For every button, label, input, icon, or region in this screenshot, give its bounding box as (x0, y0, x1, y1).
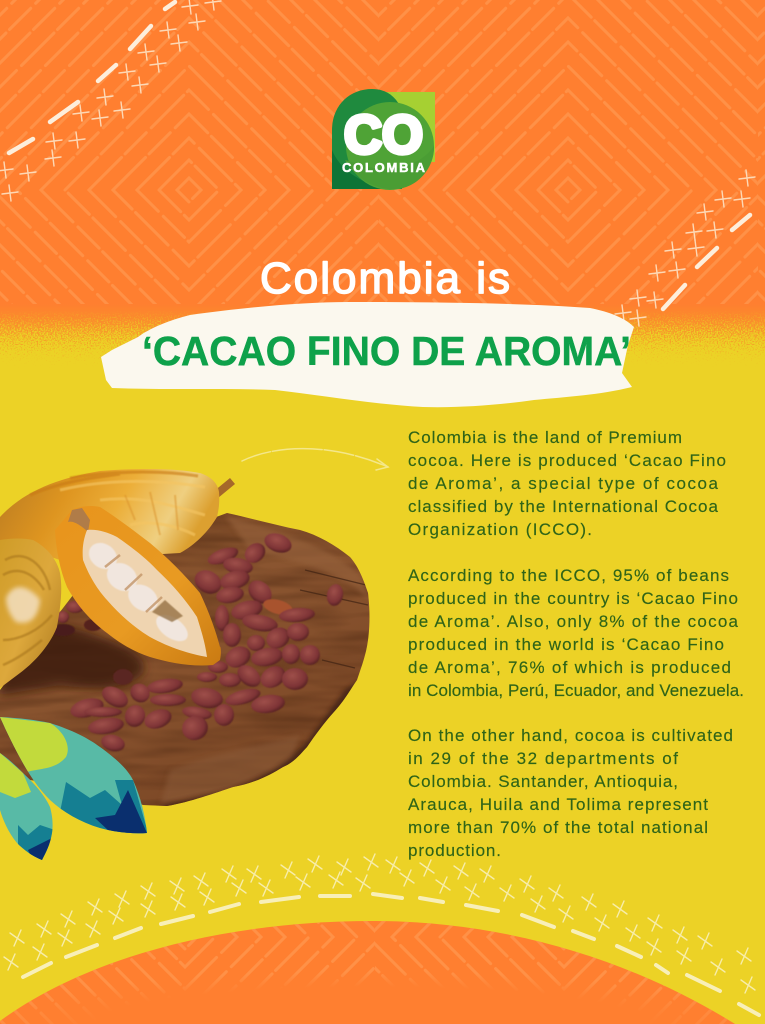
heading banner: white brush stroke with green text (101, 302, 634, 407)
text block: paragraph 1: cocoa. Here is produced ‘Cacao Fino (408, 451, 726, 470)
text block: paragraph 2: de Aroma’. Also, only 8% of the cocoa (408, 612, 739, 631)
logo: CO Colombia: CO (344, 105, 423, 165)
text block: paragraph 3: On the other hand, cocoa is cultivated (408, 726, 733, 745)
open cacao pod (55, 506, 221, 666)
wooden board (0, 513, 370, 806)
photo: cacao pods and beans on wooden board (0, 469, 380, 820)
text block: paragraph 1: de Aroma’, a special type of cocoa (408, 474, 719, 493)
text block: paragraph 2: de Aroma’, 76% of which is produced (408, 658, 731, 677)
large leaf (0, 717, 147, 834)
logo: CO Colombia: COLOMBIA (342, 160, 426, 175)
text block: paragraph 1: Organization (ICCO). (408, 520, 592, 539)
closed cacao pod, left (0, 538, 61, 688)
text block: paragraph 3 (408, 726, 733, 860)
icon: decorative leaves (0, 710, 150, 865)
text block: paragraph 2 (408, 566, 744, 700)
text block: paragraph 3: Colombia. Santander, Antioquia, (408, 772, 678, 791)
text block: paragraph 2: produced in the country is ‘Cacao Fino (408, 589, 738, 608)
closed cacao pod, top (0, 469, 235, 560)
cacao beans (51, 530, 345, 754)
text block: paragraph 3: in 29 of the 32 departments of (408, 749, 678, 768)
text block: paragraph 2: in Colombia, Perú, Ecuador, and Venezuela. (408, 681, 744, 700)
heading banner: white brush stroke with green text: ‘CACAO FINO DE AROMA’ (142, 328, 631, 374)
decoration: stitched crosses and dashes along bottom arc (4, 854, 759, 1015)
text block: paragraph 1: classified by the International Cocoa (408, 497, 719, 516)
arrow: curved pointer to the text (242, 449, 388, 470)
text block: paragraph 1 (408, 428, 726, 539)
text block: paragraph 3: more than 70% of the total national (408, 818, 708, 837)
title: Colombia is: Colombia is (260, 254, 510, 303)
logo: CO Colombia (332, 89, 435, 190)
text block: paragraph 2: produced in the world is ‘Cacao Fino (408, 635, 724, 654)
text block: paragraph 2: According to the ICCO, 95% of beans (408, 566, 729, 585)
decoration: stitched crosses top left (0, 0, 221, 201)
text block: paragraph 1: Colombia is the land of Premium (408, 428, 682, 447)
decoration: stitched crosses top right (615, 170, 755, 326)
small leaf (0, 753, 53, 860)
text block: paragraph 3: Arauca, Huila and Tolima represent (408, 795, 708, 814)
bottom arc: orange patterned semicircle (0, 915, 765, 1024)
text block: paragraph 3: production. (408, 841, 501, 860)
